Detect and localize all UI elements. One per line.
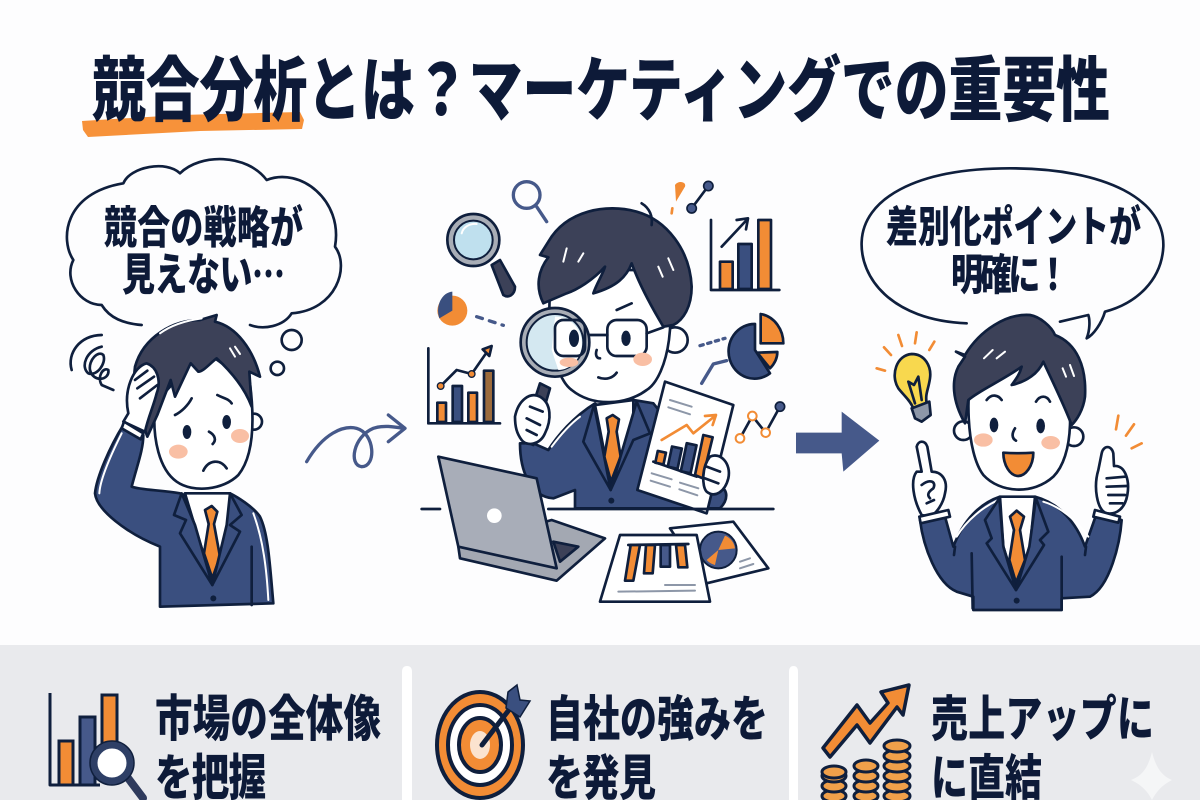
icon: exclamation and nodes — [672, 181, 713, 213]
panel: bottom benefits band — [0, 645, 1200, 800]
icon: large magnifier — [447, 214, 515, 296]
thought bubble: 競合の戦略が — [104, 203, 303, 253]
icon: network line — [736, 402, 785, 443]
benefit text — [931, 693, 1154, 800]
laptop — [438, 457, 605, 581]
happy figure — [913, 315, 1142, 610]
benefit text: 自社の強みを — [546, 693, 768, 747]
benefit text: 市場の全体像 — [155, 692, 381, 747]
icon: light bulb — [877, 332, 934, 422]
icon: chart with magnifier — [50, 693, 143, 798]
chart: top right bars — [711, 218, 779, 290]
benefit: sales growth — [822, 685, 1154, 800]
benefit text — [546, 693, 768, 800]
thought bubble — [67, 159, 341, 375]
analyst figure — [515, 203, 726, 508]
title text: 競合分析とは？マーケティングでの重要性 — [92, 52, 1110, 131]
chart: left bar and line — [428, 346, 500, 423]
speech bubble: 差別化ポイントが — [886, 203, 1141, 252]
worried figure — [71, 315, 273, 607]
thought bubble: 見えない… — [122, 240, 285, 304]
icon: small pie chart — [437, 292, 503, 326]
benefit text: 売上アップに — [931, 693, 1154, 747]
benefit: own strengths — [437, 685, 768, 800]
panel: analyst with magnifier — [422, 181, 785, 602]
title with orange underline — [82, 52, 1110, 137]
speech bubble: 明確に！ — [951, 252, 1069, 300]
benefit: market overview — [50, 692, 381, 800]
report held in hand — [637, 382, 733, 513]
desk documents — [600, 522, 768, 602]
icon: target with arrow — [437, 685, 530, 798]
speech bubble — [862, 168, 1163, 338]
divider left — [402, 666, 412, 800]
icon: large pie chart — [700, 314, 783, 383]
panel: happy businessman — [862, 168, 1163, 610]
icon: small magnifier — [513, 182, 547, 222]
divider right — [789, 666, 798, 800]
desk line — [422, 505, 773, 513]
sparkle mark — [1131, 752, 1172, 800]
benefit text — [155, 692, 381, 800]
panel: worried businessman — [67, 159, 341, 607]
arrow: curved loop — [307, 415, 405, 467]
icon: rising arrow and coins — [822, 685, 910, 800]
arrow: straight — [796, 412, 879, 472]
title underline brush stroke — [82, 112, 304, 137]
